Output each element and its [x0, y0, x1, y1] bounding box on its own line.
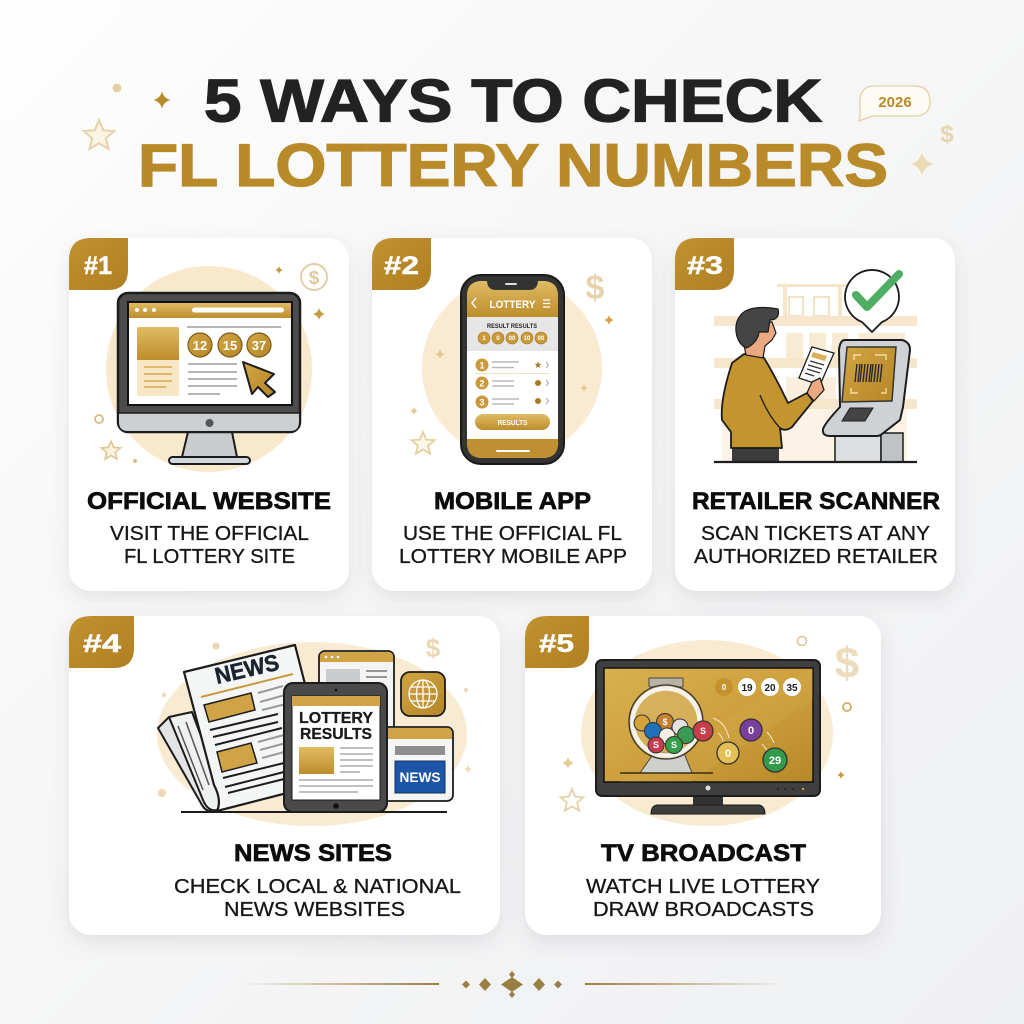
icon: smartphone: 3: [479, 398, 485, 408]
title: 5 WAYS TO CHECK: [204, 68, 822, 134]
drawn numbers: [715, 678, 801, 696]
decorations: $: [426, 633, 441, 663]
icon: smartphone: [461, 275, 564, 464]
description: [174, 876, 461, 921]
description: LOTTERY MOBILE APP: [399, 546, 627, 568]
title: [138, 68, 888, 199]
title: FL LOTTERY NUMBERS: [138, 132, 888, 199]
icon: smartphone: RESULTS: [498, 420, 528, 427]
badge 4: #4: [83, 630, 121, 658]
icon: smartphone: 00: [509, 336, 516, 342]
panel: mobile app: [372, 238, 652, 591]
description: CHECK LOCAL & NATIONAL: [174, 876, 461, 898]
description: USE THE OFFICIAL FL: [403, 523, 622, 545]
icon: newspaper: NEWS: [212, 649, 281, 689]
heading: MOBILE APP: [434, 488, 591, 515]
description: AUTHORIZED RETAILER: [694, 546, 938, 568]
store shelves backdrop: [714, 284, 917, 462]
icon: smartphone: RESULT RESULTS: [487, 324, 537, 330]
icon: browser window: [319, 651, 394, 731]
panel: tv broadcast: [525, 616, 881, 935]
footer ornament: [240, 971, 785, 998]
badge 3: #3: [687, 252, 723, 280]
year speech bubble: 2026: [878, 94, 912, 111]
heading: TV BROADCAST: [601, 840, 806, 867]
description: [586, 876, 820, 921]
year speech bubble: [859, 86, 930, 121]
badge 2: [372, 238, 431, 290]
icon: bouncing balls: 0: [748, 725, 754, 737]
icon: check bubble: [845, 270, 899, 332]
icon: person with ticket: [722, 307, 834, 462]
title decorations: [84, 84, 954, 176]
icon: desktop monitor: 37: [252, 338, 266, 353]
heading: NEWS SITES: [234, 840, 392, 867]
icon: lottery ball machine: S: [653, 740, 659, 750]
icon: tablet: LOTTERY: [299, 710, 374, 727]
icon: smartphone: LOTTERY: [490, 299, 536, 311]
icon: lottery ball machine: S: [700, 726, 706, 736]
icon: kiosk: [823, 340, 910, 462]
icon: desktop monitor: 15: [223, 338, 237, 353]
ellipse backdrop: [581, 640, 833, 826]
icon: lottery ball machine: S: [671, 740, 677, 750]
heading: RETAILER SCANNER: [692, 488, 940, 515]
icon: bouncing balls: [713, 718, 787, 772]
title decorations: $: [940, 121, 954, 148]
description: DRAW BROADCASTS: [593, 899, 814, 921]
icon: lottery ball machine: $: [662, 717, 668, 727]
badge 4: [69, 616, 134, 668]
circle backdrop: [106, 266, 312, 472]
icon: smartphone: 10: [524, 336, 531, 342]
icon: smartphone: 0: [496, 336, 500, 342]
drawn numbers: 0: [722, 683, 727, 692]
description: [110, 523, 309, 568]
circle backdrop: [422, 278, 602, 458]
icon: smartphone: 2: [479, 378, 485, 388]
description: NEWS WEBSITES: [224, 899, 405, 921]
icon: desktop monitor: 12: [193, 338, 207, 353]
decorations: $: [309, 268, 320, 289]
drawn numbers: 19: [741, 683, 753, 694]
badge 5: [525, 616, 589, 668]
icon: smartphone: 00: [538, 336, 545, 342]
icon: globe app: [401, 672, 445, 716]
heading: OFFICIAL WEBSITE: [87, 488, 331, 515]
decorations: $: [835, 639, 859, 688]
icon: bouncing balls: 29: [769, 755, 781, 767]
icon: bouncing balls: 0: [725, 748, 731, 760]
description: FL LOTTERY SITE: [124, 546, 295, 568]
icon: tablet: RESULTS: [300, 726, 372, 743]
ellipse backdrop: [157, 642, 467, 826]
icon: smartphone: 1: [482, 336, 486, 342]
icon: lottery ball machine: [620, 678, 713, 773]
icon: news browser: NEWS: [400, 770, 440, 785]
icon: television: [596, 660, 820, 814]
description: SCAN TICKETS AT ANY: [701, 523, 930, 545]
icon: smartphone: 1: [479, 360, 485, 370]
panel: official website: [69, 238, 349, 591]
decorations: [561, 636, 859, 811]
drawn numbers: 20: [764, 683, 776, 694]
drawn numbers: 35: [786, 683, 798, 694]
description: WATCH LIVE LOTTERY: [586, 876, 820, 898]
icon: news browser: [380, 727, 453, 801]
icon: desktop monitor: [118, 293, 300, 464]
icon: tablet: [284, 683, 387, 812]
description: VISIT THE OFFICIAL: [110, 523, 309, 545]
description: [694, 523, 938, 568]
decorations: [158, 633, 472, 797]
decorations: [410, 269, 614, 454]
badge 3: [675, 238, 734, 290]
panel: news sites: [69, 616, 500, 935]
panel: retailer scanner: [675, 238, 955, 591]
decorations: $: [586, 269, 605, 307]
badge 1: #1: [84, 252, 112, 280]
badge 1: [69, 238, 128, 290]
decorations: [95, 264, 327, 463]
description: [399, 523, 627, 568]
badge 5: #5: [539, 630, 574, 658]
badge 2: #2: [384, 252, 419, 280]
icon: newspaper: [158, 645, 330, 811]
